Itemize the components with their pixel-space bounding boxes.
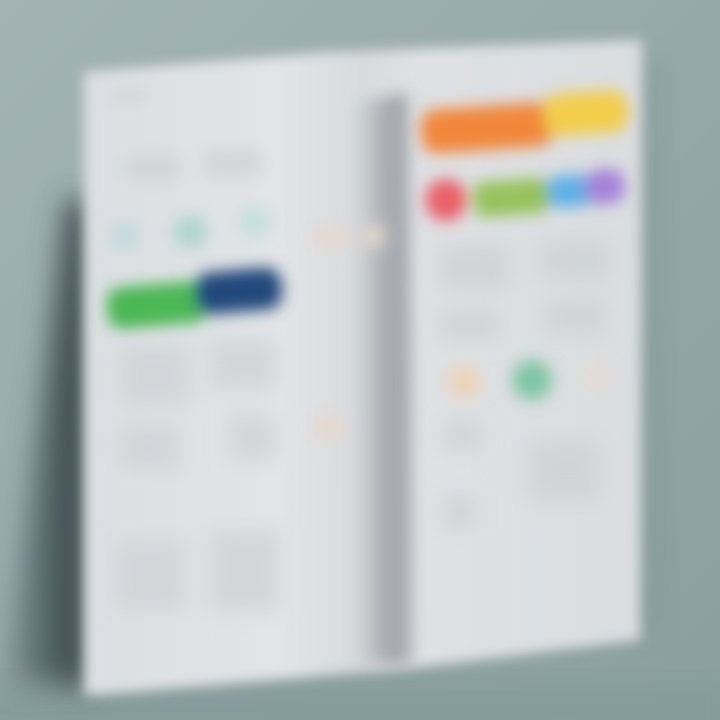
fold accent marks (312, 226, 384, 438)
brochure cast shadow (8, 200, 92, 688)
navy banner segment (193, 266, 284, 316)
green banner segment (105, 280, 209, 330)
right top colour banner (420, 89, 629, 155)
centre fold (350, 92, 416, 665)
right panel icons (448, 360, 609, 400)
orange banner segment (420, 101, 554, 155)
purple chip (584, 168, 626, 205)
left colour banner (105, 266, 284, 330)
floor shadow band (0, 680, 720, 720)
right panel text smudges (440, 240, 610, 530)
left panel heading smudges (112, 90, 260, 181)
brochure paper (84, 40, 642, 696)
right side soft shadow (640, 60, 665, 640)
left panel text smudges (115, 340, 280, 610)
right colour chips row (425, 168, 626, 221)
left panel icons (110, 207, 269, 251)
blue chip (547, 173, 594, 208)
yellow banner segment (543, 89, 629, 137)
green chip (473, 177, 549, 218)
red chip (425, 179, 467, 221)
